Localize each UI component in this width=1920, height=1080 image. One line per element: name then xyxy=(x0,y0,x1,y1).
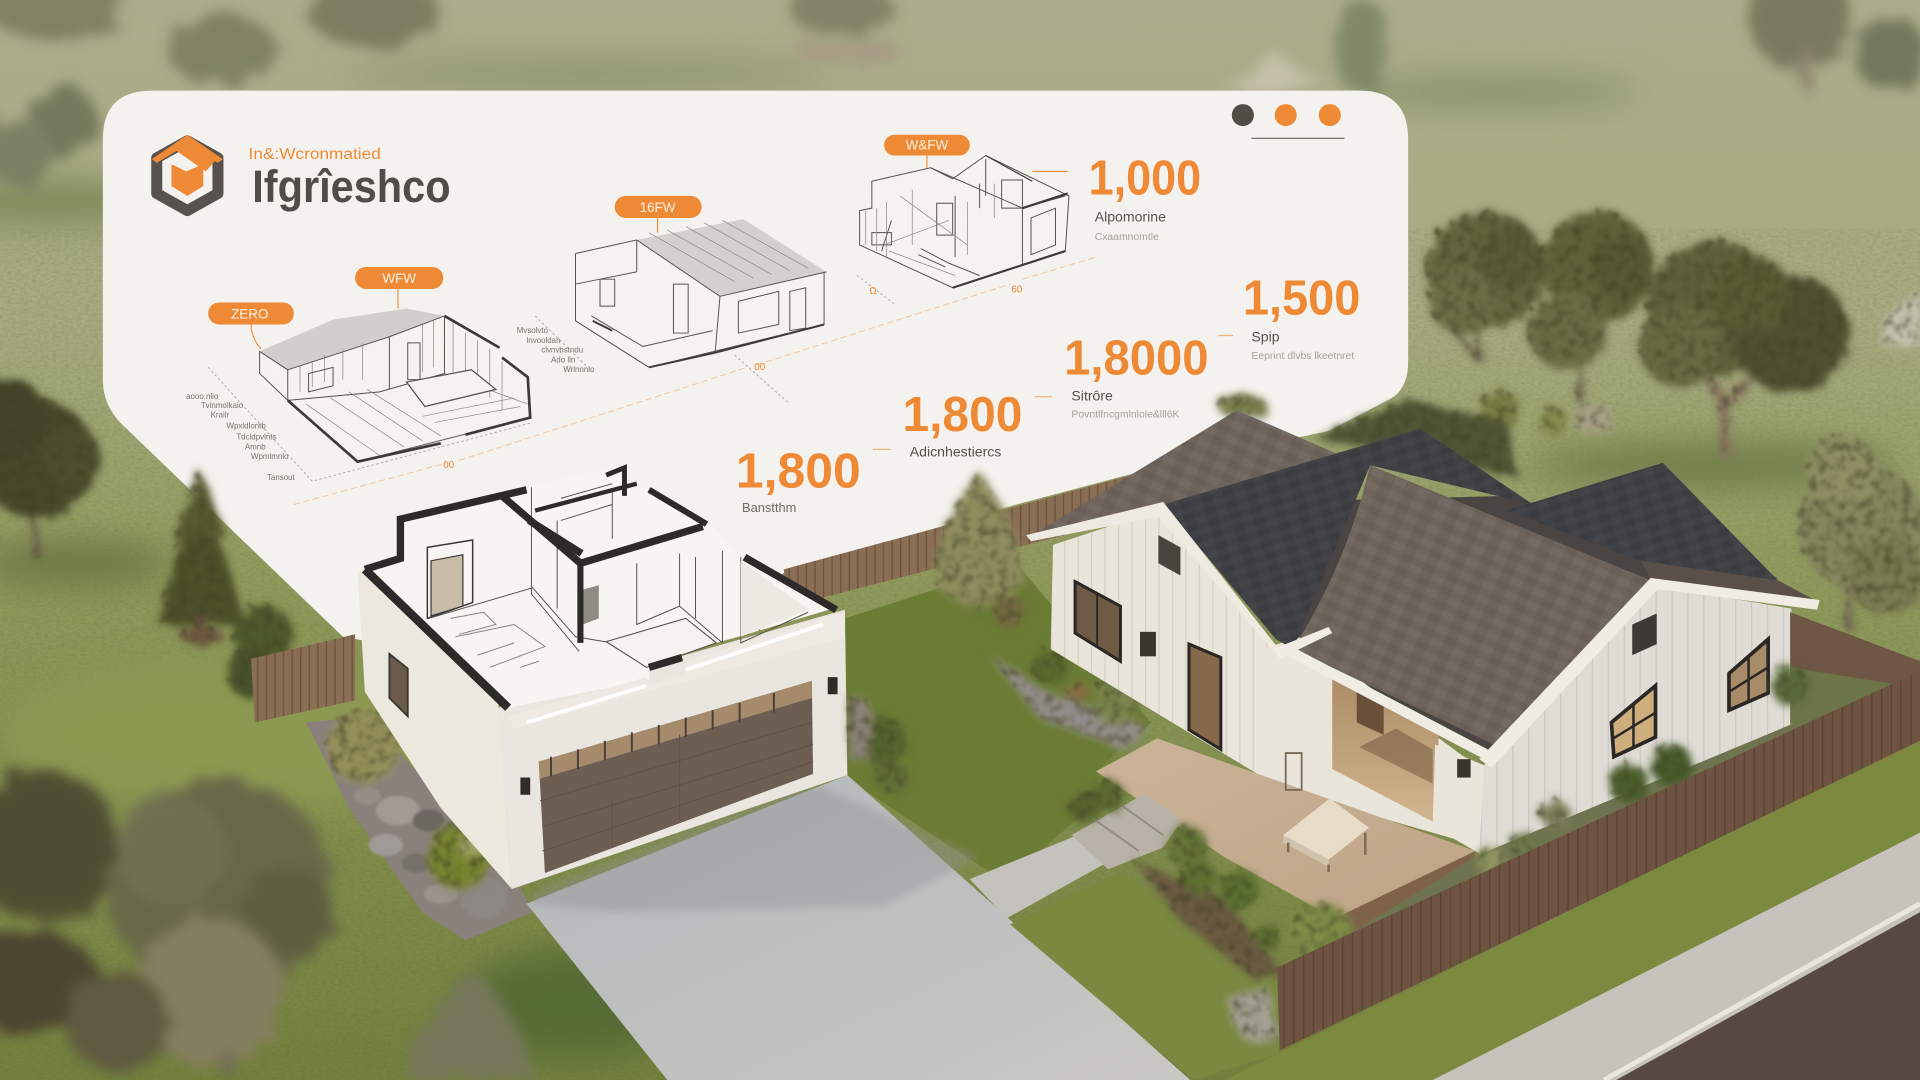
annotation stack centre xyxy=(517,326,595,374)
dimension lines: Ω xyxy=(869,286,877,297)
driveway xyxy=(527,775,1190,1080)
side trees xyxy=(0,377,1920,631)
garage parapet xyxy=(508,612,845,729)
garage side wall xyxy=(358,566,512,889)
stat: 1,000: Alpomorine xyxy=(1095,209,1166,225)
left wall xyxy=(1051,509,1276,784)
status dots xyxy=(1232,104,1344,138)
garage sketch building xyxy=(358,465,847,889)
interior sketch lines xyxy=(427,484,808,667)
annotation stack left: Tvinmolkaio xyxy=(201,401,244,410)
stat: 1,000 xyxy=(1089,152,1201,243)
stat: 1,800 middle: 1,800 xyxy=(902,388,1022,442)
stat: 1,500 xyxy=(1218,272,1360,362)
back fence xyxy=(784,471,1145,606)
dark main roof xyxy=(1163,429,1533,649)
annotation stack left: Wpxldlontb xyxy=(227,422,266,431)
upper vent xyxy=(1158,535,1180,576)
annotation stack centre: Wrlnnnlo xyxy=(563,365,595,374)
dimension lines: 00 xyxy=(754,362,766,373)
dimension lines: 00 xyxy=(443,460,455,471)
callout pills: WFW xyxy=(382,271,416,286)
eave strip brown xyxy=(1641,561,1817,601)
right wall xyxy=(1479,585,1791,855)
steps xyxy=(1071,793,1182,869)
driveway shadow xyxy=(527,784,980,912)
callout pills: W&FW xyxy=(906,137,949,152)
stat: 1,000: 1,000 xyxy=(1089,152,1201,206)
panel: infographic card xyxy=(103,91,1408,686)
garage lamps xyxy=(520,677,838,795)
main house xyxy=(1026,410,1820,855)
deck xyxy=(1071,738,1476,943)
annotation stack left: Wpmlmnlo xyxy=(251,452,289,461)
stat: 1,000: Cxaamnomtle xyxy=(1095,232,1159,243)
annotation stack left: Krailr xyxy=(211,411,229,420)
deck chair xyxy=(1286,753,1302,790)
garage front wall xyxy=(498,610,847,889)
stat: 1,800 middle: Adicnhestiercs xyxy=(910,444,1001,460)
porch opening xyxy=(1332,671,1439,823)
stat: 1,500: Eeprint dlvbs lkeetnret xyxy=(1251,351,1354,362)
stat: 1,8000: Povntlfncgmlnlole&lll6K xyxy=(1071,410,1179,421)
annotation stack centre: Ado lln xyxy=(551,355,575,364)
sketch: house one xyxy=(186,309,530,462)
door xyxy=(1189,644,1221,749)
conifer tree and shrubs left xyxy=(157,468,293,698)
annotation stack centre: clvnvbstndu xyxy=(541,346,583,355)
front grass near walkway xyxy=(1010,872,1280,1080)
sketch: house two xyxy=(576,219,827,367)
eave trim left xyxy=(1026,502,1276,651)
wall lamp xyxy=(1140,632,1156,656)
far fence panel xyxy=(1790,612,1920,688)
interior floor and walls xyxy=(373,465,833,708)
tiny annotation top: aooo.nlio xyxy=(186,392,219,401)
rear brown roof xyxy=(1032,410,1341,535)
porch middle wall xyxy=(1261,637,1476,845)
annotation stack left: Amnb xyxy=(245,442,266,451)
stat: 1,800 lower: 1,800 xyxy=(736,444,861,498)
sidewalk xyxy=(1433,833,1920,1080)
stat: 1,500: 1,500 xyxy=(1243,272,1360,326)
bed shrubs xyxy=(1069,666,1810,1041)
stat: 1,800 lower: Banstthm xyxy=(742,500,796,515)
rock bed left of garage xyxy=(306,710,533,940)
callout pills: 16FW xyxy=(640,200,676,215)
stat: 1,8000 xyxy=(1035,332,1209,421)
annotation stack left: Tdcldpvlnts xyxy=(236,433,277,442)
dimension lines: 60 xyxy=(1011,285,1023,296)
trim over porch xyxy=(1286,647,1488,759)
annotation stack left xyxy=(201,401,296,482)
front brown roof xyxy=(1293,465,1651,746)
strip behind fence xyxy=(1277,671,1920,967)
garage door xyxy=(539,681,813,873)
stat: 1,8000: Sitrôre xyxy=(1071,387,1113,403)
deck bench xyxy=(1283,798,1369,872)
sketch: house three xyxy=(860,156,1069,288)
porch lamp xyxy=(1457,759,1471,778)
logo small text: In&:Wcronmatied xyxy=(249,146,381,163)
dimension lines xyxy=(208,257,1096,504)
tree near fence xyxy=(936,471,1026,628)
stat: 1,500: Spip xyxy=(1251,329,1280,345)
stat: 1,800 middle xyxy=(873,388,1022,460)
far side fence backing xyxy=(1790,612,1920,729)
annotation stack centre: Mvsolvto xyxy=(517,326,549,335)
house left window xyxy=(1075,582,1120,661)
front fence xyxy=(1277,671,1920,1051)
right windows xyxy=(1611,613,1768,757)
curb and road xyxy=(1616,912,1920,1080)
logo icon xyxy=(152,135,223,211)
bushes behind roof xyxy=(1218,394,1518,478)
left fence xyxy=(251,634,355,722)
annotation stack left: Tansout xyxy=(267,473,296,482)
callout pills: ZERO xyxy=(231,306,268,321)
rear shrubs by garage xyxy=(849,649,1151,795)
garage side window xyxy=(389,654,408,716)
callout pills xyxy=(208,135,970,349)
stat: 1,8000: 1,8000 xyxy=(1064,332,1209,386)
mid-field trees right xyxy=(1428,211,1920,456)
right eave trim xyxy=(1479,578,1820,768)
distant trees xyxy=(0,0,1920,187)
bottom left blurred foreground trees xyxy=(0,769,533,1080)
logo wordmark: Ifgrîeshco xyxy=(252,161,451,212)
annotation stack centre: lnvooldan xyxy=(527,336,561,345)
rear dark roof right xyxy=(1506,463,1778,580)
walkway xyxy=(970,833,1117,918)
street grass xyxy=(1224,741,1920,1080)
porch column xyxy=(1433,744,1484,855)
thick black wall tops xyxy=(365,468,836,708)
lawn between buildings xyxy=(845,563,1151,882)
backing under roofs xyxy=(1163,496,1778,759)
card background xyxy=(103,91,1408,686)
